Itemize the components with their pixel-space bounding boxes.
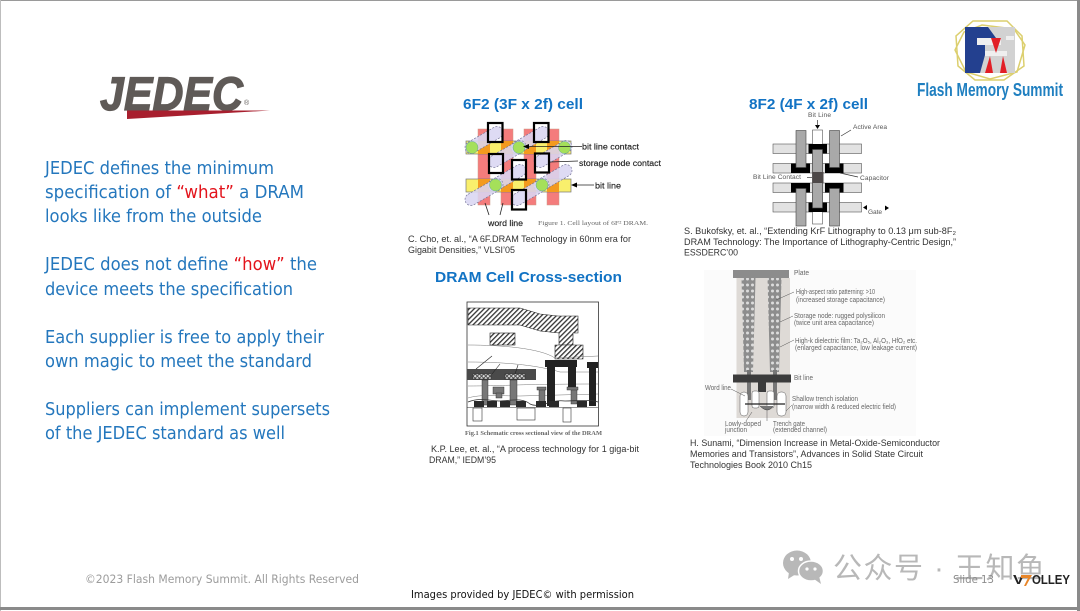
diagram: stacked capacitor cross-section: High-k dielectric film: Ta₂O₅, Al₂O₃, HfO₂ etc. (795, 338, 917, 345)
diagram: 8F2 cell layout: Capacitor (860, 175, 890, 182)
text block: JEDEC description: own magic to meet the standard (45, 351, 312, 372)
diagram: stacked capacitor cross-section: (narrow width & reduced electric field) (792, 404, 896, 411)
diagram: stacked capacitor cross-section: Trench gate (773, 421, 805, 428)
logo: JEDEC: ® (244, 99, 250, 107)
caption: Sunami citation: H. Sunami, “Dimension Increase in Metal-Oxide-Semiconductor (690, 438, 940, 448)
diagram: 6F2 cell layout (463, 123, 662, 228)
logo: Wolley: OLLEY (1032, 573, 1071, 587)
diagram: stacked capacitor cross-section: Plate (794, 270, 809, 277)
heading: 8F2 cell: 8F2 (4F x 2f) cell (749, 96, 868, 113)
caption: Lee cross-section citation (429, 444, 639, 465)
diagram: stacked capacitor cross-section (704, 270, 917, 436)
diagram: stacked capacitor cross-section: (twice unit area capacitance) (794, 320, 874, 327)
watermark: WeChat icon (783, 550, 824, 584)
caption: Bukofsky 8F2 citation: S. Bukofsky, et. al., “Extending KrF Lithography to 0.13 μm sub-8F₂ (684, 226, 957, 236)
diagram: 6F2 cell layout: bit line contact (582, 142, 640, 152)
diagram: 6F2 cell layout: word line (487, 219, 524, 228)
caption: Lee cross-section citation: DRAM,” IEDM’95 (429, 455, 496, 465)
diagram: stacked capacitor cross-section: Lowly-doped (725, 421, 761, 428)
logo: JEDEC: JEDEC (100, 67, 244, 120)
diagram: stacked capacitor cross-section: Shallow trench isolation (792, 396, 858, 403)
footer: image credit: Images provided by JEDEC© with permission (411, 588, 634, 601)
diagram: stacked capacitor cross-section: junction (724, 427, 747, 434)
diagram: 8F2 cell layout (753, 112, 890, 226)
logo: Wolley: V (1013, 572, 1024, 587)
diagram: 6F2 cell layout: bit line (595, 182, 622, 190)
heading: DRAM cell cross-section: DRAM Cell Cross-section (435, 269, 622, 286)
watermark: account name: 公众号 · 王知鱼 (833, 552, 1045, 585)
text block: JEDEC description: looks like from the outside (45, 206, 262, 227)
caption: Cho 6F2 citation: C. Cho, et. al., “A 6F.DRAM Technology in 60nm era for (408, 234, 631, 244)
diagram: DRAM cell cross-section: Fig.1 Schematic cross sectional view of the DRAM (465, 430, 602, 437)
caption: Sunami citation (690, 438, 940, 470)
text block: JEDEC description: of the JEDEC standard as well (45, 423, 285, 444)
caption: Sunami citation: Technologies Book 2010 Ch15 (690, 460, 812, 470)
diagram: 8F2 cell layout: Active Area (853, 124, 887, 131)
text block: JEDEC description: device meets the specification (45, 279, 293, 300)
caption: Cho 6F2 citation (408, 234, 631, 255)
text block: JEDEC description: JEDEC defines the minimum (44, 158, 274, 179)
caption: Sunami citation: Memories and Transistors”, Advances in Solid State Circuit (690, 449, 923, 459)
text block: JEDEC description: Each supplier is free to apply their (45, 327, 325, 348)
caption: Bukofsky 8F2 citation: DRAM Technology: The Importance of Lithography-Centric Design,” (684, 237, 956, 247)
text block: JEDEC description: specification of “what” a DRAM (45, 182, 304, 203)
text block: JEDEC description (44, 158, 330, 444)
diagram: 6F2 cell layout: storage node contact (579, 159, 662, 168)
diagram: 6F2 cell layout: Figure 1. Cell layout of 6F² DRAM. (538, 220, 648, 227)
heading: 6F2 cell: 6F2 (3F x 2f) cell (463, 96, 583, 113)
caption: Bukofsky 8F2 citation (684, 226, 957, 258)
footer: copyright: ©2023 Flash Memory Summit. All Rights Reserved (85, 572, 359, 586)
diagram: stacked capacitor cross-section: (extended channel) (773, 427, 827, 434)
diagram: stacked capacitor cross-section: (increased storage capacitance) (796, 297, 885, 304)
diagram: stacked capacitor cross-section: Bit line (794, 375, 813, 382)
caption: Lee cross-section citation: K.P. Lee, et. al., “A process technology for 1 giga-bit (431, 444, 639, 454)
logo: Flash Memory Summit (917, 21, 1063, 100)
diagram: stacked capacitor cross-section: Storage node: rugged polysilicon (794, 313, 885, 320)
footer: slide number: Slide 13 (953, 573, 994, 586)
diagram: 8F2 cell layout: Bit Line (808, 112, 831, 119)
caption: Bukofsky 8F2 citation: ESSDERC’00 (684, 248, 738, 258)
caption: Cho 6F2 citation: Gigabit Densities,” VLSI’05 (408, 245, 515, 255)
diagram: 8F2 cell layout: Gate (868, 209, 882, 216)
diagram: stacked capacitor cross-section: (enlarged capacitance, low leakage current) (795, 345, 917, 352)
diagram: stacked capacitor cross-section: Word line (705, 385, 731, 392)
diagram: stacked capacitor cross-section: High-aspect ratio patterning: >10 (796, 289, 875, 296)
diagram: 8F2 cell layout: Bit Line Contact (753, 174, 801, 181)
text block: JEDEC description: Suppliers can implement supersets (45, 399, 330, 420)
diagram: DRAM cell cross-section (465, 302, 602, 437)
text block: JEDEC description: JEDEC does not define “how” the (44, 254, 317, 275)
logo: Wolley (1013, 572, 1071, 587)
